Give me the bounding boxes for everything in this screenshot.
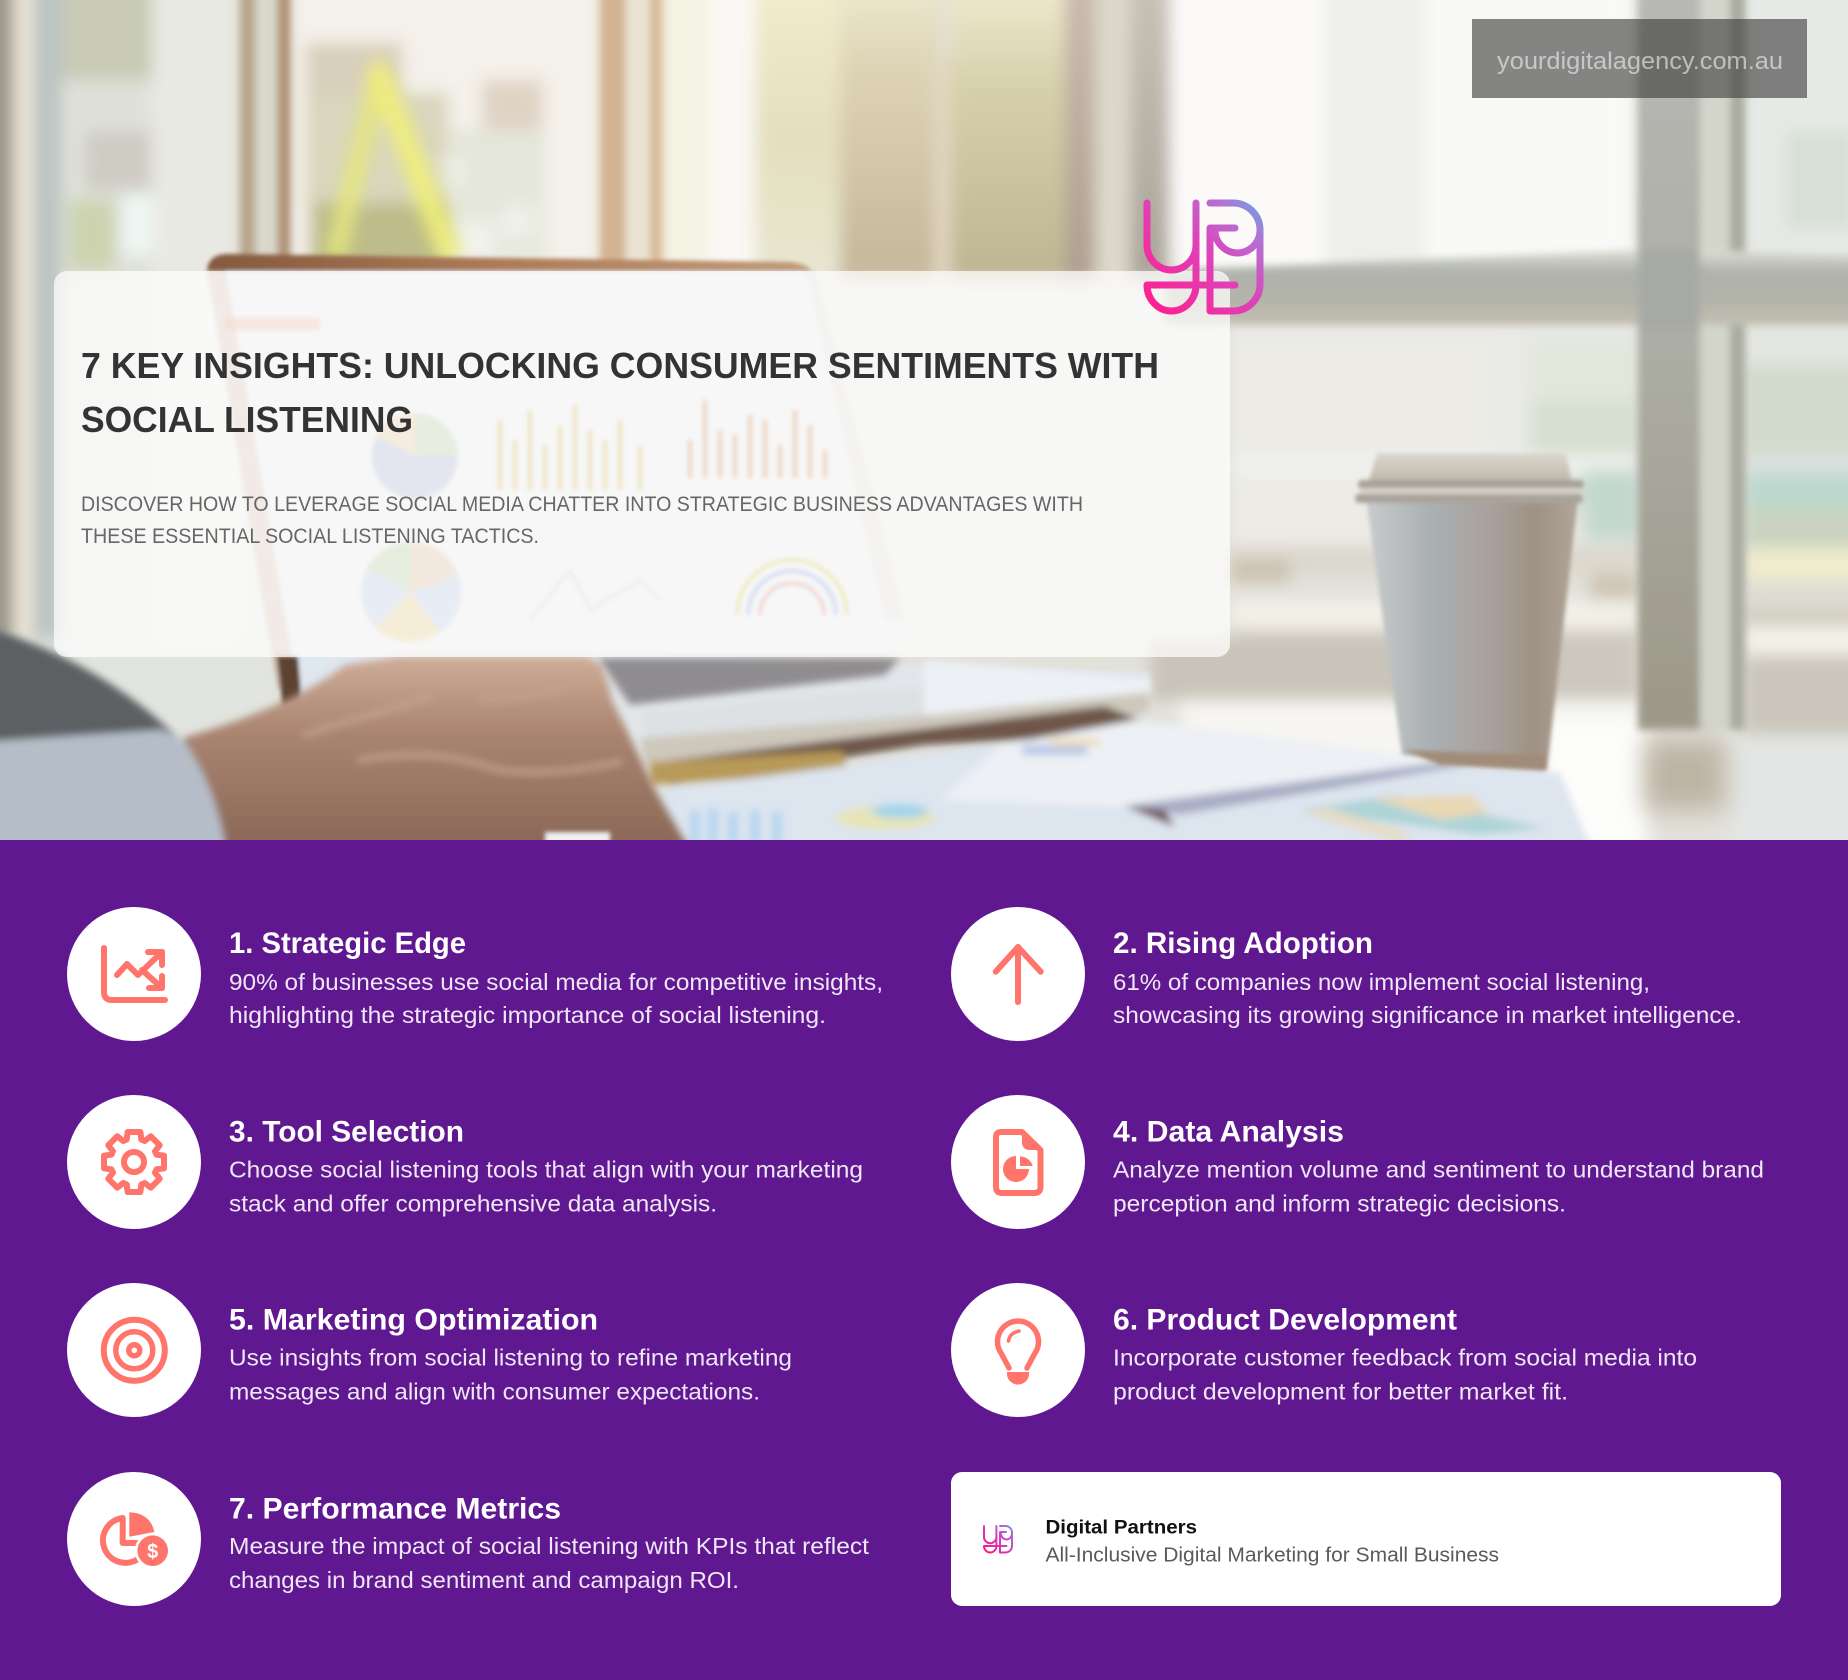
description: Choose social listening tools that align with your marketing: [229, 1156, 863, 1182]
window frames: [240, 0, 1848, 730]
description: perception and inform strategic decisions.: [1113, 1190, 1566, 1216]
icon: pie chart with dollar coin: $: [147, 1541, 158, 1563]
description: changes in brand sentiment and campaign ROI.: [229, 1567, 739, 1593]
title heading: SOCIAL LISTENING: [81, 399, 413, 440]
company card: Digital Partners: [951, 1472, 1781, 1606]
heading: 5. Marketing Optimization: [229, 1304, 598, 1336]
description: 61% of companies now implement social listening,: [1113, 969, 1650, 995]
card name: Digital Partners: [1046, 1516, 1197, 1538]
subtitle: [81, 493, 1083, 548]
icon: up arrow: [996, 947, 1041, 1002]
description: [1113, 1156, 1764, 1216]
description: 90% of businesses use social media for competitive insights,: [229, 969, 883, 995]
item 4: Data Analysis: [951, 1095, 1764, 1229]
papers: [659, 740, 1590, 840]
icon: target: [104, 1320, 165, 1381]
description: Analyze mention volume and sentiment to understand brand: [1113, 1156, 1764, 1182]
blurred window background: [0, 0, 1848, 860]
icon: document with pie chart: [996, 1130, 1043, 1193]
description: [229, 1156, 863, 1216]
heading: 4. Data Analysis: [1113, 1116, 1344, 1148]
blurred highlights and table reflection: [442, 162, 1725, 810]
yellow stand: [337, 73, 448, 250]
item 6: Product Development: [951, 1283, 1697, 1417]
description: product development for better market fit.: [1113, 1378, 1568, 1404]
hero photo: laptop and coffee on a desk by a window: [0, 0, 1848, 860]
icon: line chart with arrows: [104, 948, 165, 1000]
title panel: [54, 271, 1230, 657]
title heading: 7 KEY INSIGHTS: UNLOCKING CONSUMER SENTIMENTS WITH: [81, 345, 1159, 386]
subtitle: THESE ESSENTIAL SOCIAL LISTENING TACTICS.: [81, 525, 539, 548]
description: messages and align with consumer expectations.: [229, 1378, 760, 1404]
icon: light bulb: [998, 1321, 1038, 1384]
heading: 2. Rising Adoption: [1113, 927, 1373, 960]
heading: 7. Performance Metrics: [229, 1492, 561, 1526]
description: Use insights from social listening to refine marketing: [229, 1344, 792, 1370]
description: [229, 1533, 869, 1593]
item 7: Performance Metrics: [67, 1472, 869, 1606]
description: Measure the impact of social listening with KPIs that reflect: [229, 1533, 869, 1559]
description: Incorporate customer feedback from social media into: [1113, 1344, 1697, 1370]
item 3: Tool Selection: [67, 1095, 863, 1229]
item 2: Rising Adoption: [951, 907, 1742, 1041]
card tagline: All-Inclusive Digital Marketing for Small Business: [1046, 1544, 1499, 1566]
description: [1113, 1344, 1697, 1404]
description: showcasing its growing significance in market intelligence.: [1113, 1002, 1742, 1028]
laptop: [225, 267, 806, 660]
logo: YDP monogram: [1147, 203, 1260, 311]
heading: 1. Strategic Edge: [229, 927, 466, 960]
coffee cup: [1355, 453, 1584, 771]
item 1: Strategic Edge: [67, 907, 883, 1041]
heading: 3. Tool Selection: [229, 1116, 464, 1148]
arm and hand: [0, 625, 690, 850]
heading: 6. Product Development: [1113, 1304, 1457, 1336]
title heading: [81, 345, 1159, 440]
purple content background: [0, 840, 1848, 1680]
description: [229, 1344, 792, 1404]
icon: pie chart with dollar coin: [103, 1512, 171, 1569]
item 5: Marketing Optimization: [67, 1283, 792, 1417]
icon: gear: [104, 1132, 164, 1192]
subtitle: DISCOVER HOW TO LEVERAGE SOCIAL MEDIA CHATTER INTO STRATEGIC BUSINESS ADVANTAGES WITH: [81, 493, 1083, 516]
description: stack and offer comprehensive data analysis.: [229, 1190, 717, 1216]
website badge: yourdigitalagency.com.au: [1497, 48, 1783, 75]
website badge: [1472, 19, 1807, 98]
description: highlighting the strategic importance of social listening.: [229, 1002, 826, 1028]
small logo: [984, 1526, 1012, 1552]
description: [1113, 969, 1742, 1028]
faint laptop screen charts behind panel: [225, 318, 847, 642]
description: [229, 969, 883, 1028]
